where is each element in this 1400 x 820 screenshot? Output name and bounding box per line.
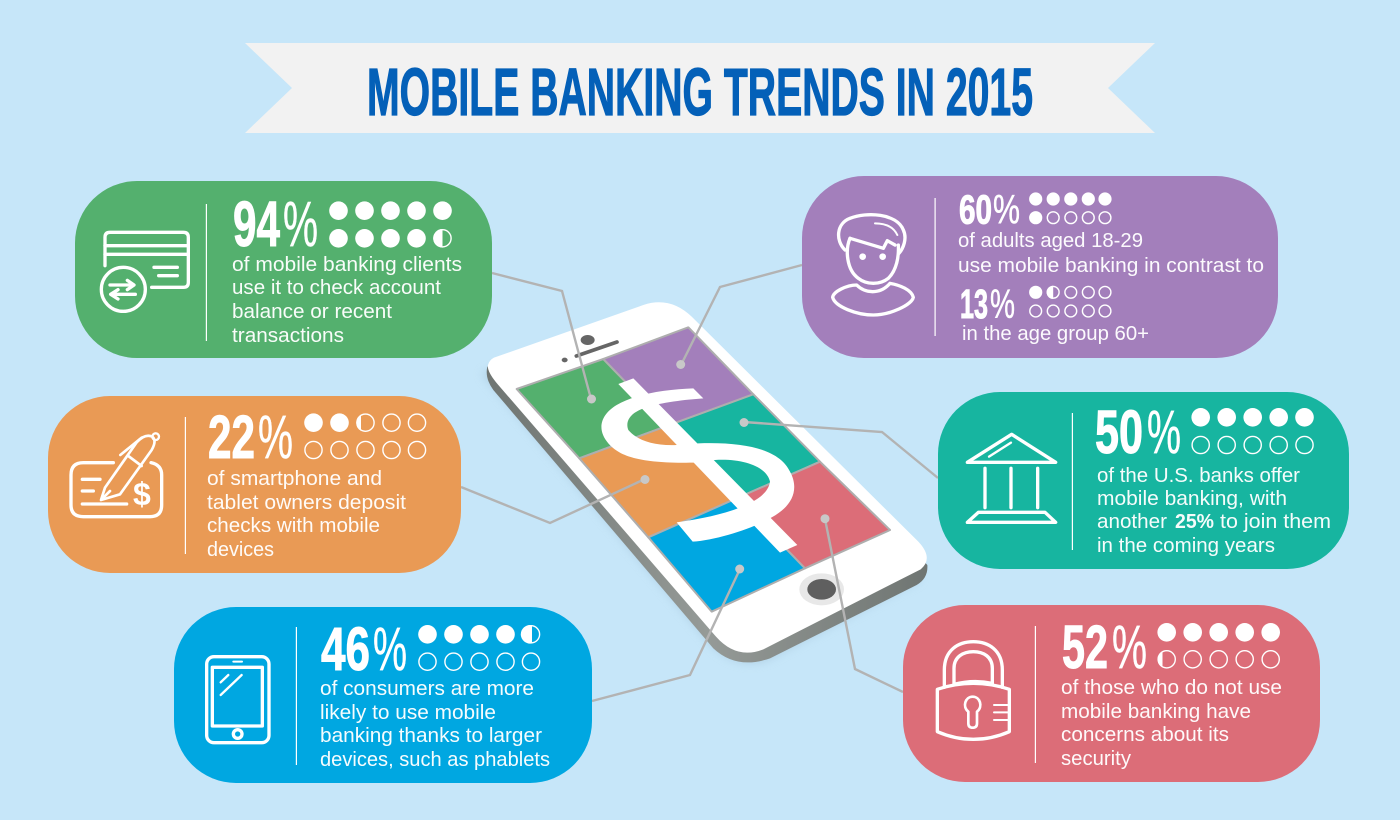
- panel: 94% account balance: [75, 181, 492, 358]
- stat: 22%: %: [258, 403, 293, 471]
- dot rating: 22%: [304, 413, 426, 459]
- dot rating: 50%: [1191, 408, 1314, 454]
- connector: orange panel to tile: [461, 475, 650, 523]
- description: [207, 467, 406, 561]
- dot rating: 52%: [1157, 623, 1280, 668]
- description: mobile banking have: [1061, 700, 1251, 723]
- description: of those who do not use: [1061, 676, 1282, 699]
- description: [320, 677, 550, 771]
- description: in the coming years: [1097, 534, 1275, 557]
- icon: young person: [833, 215, 913, 315]
- stat: 60%: 60: [959, 186, 992, 232]
- description: devices: [207, 538, 274, 561]
- description: age 60+: in the age group 60+: [962, 322, 1149, 345]
- camera and speaker: [562, 335, 617, 362]
- description: banking thanks to larger: [320, 724, 542, 747]
- description: [232, 253, 462, 347]
- dot rating: 94%: [329, 201, 452, 248]
- stat: 50%: %: [1147, 398, 1181, 466]
- description: security: [1061, 747, 1132, 770]
- stat: 13%: 13: [960, 281, 988, 327]
- icon: tablet: [207, 657, 269, 743]
- description: adults 18-29: of adults aged 18-29: [958, 229, 1143, 252]
- connector: green panel to tile: [492, 273, 596, 404]
- description: of consumers are more: [320, 677, 534, 700]
- description: adults 18-29: [958, 229, 1264, 277]
- phone shadow: [482, 317, 920, 663]
- description: [1061, 676, 1282, 770]
- description: devices, such as phablets: [320, 748, 550, 771]
- description: balance or recent: [232, 300, 392, 323]
- stat: 94%: %: [283, 188, 318, 260]
- phone side edge: [487, 357, 927, 662]
- dot rating: 46%: [418, 625, 540, 670]
- dollar sign: [601, 378, 797, 553]
- phone body: [488, 302, 927, 653]
- description: [1097, 464, 1331, 557]
- dot rating: 13%: [1029, 286, 1111, 317]
- description: 25%: [1175, 510, 1214, 533]
- panel: 52% security concerns: [903, 605, 1320, 782]
- stat: 46%: 46: [321, 615, 370, 683]
- description: tablet owners deposit: [207, 491, 406, 514]
- icon label: dollar on check: $: [133, 476, 151, 512]
- stat: 13%: %: [990, 281, 1015, 327]
- icon: check and pen: [71, 433, 162, 517]
- smartphone illustration: [482, 302, 927, 663]
- icon: bank building: [967, 434, 1056, 522]
- connector: blue panel to tile: [592, 564, 744, 701]
- stat: 46%: %: [373, 615, 407, 683]
- connector: teal panel to tile: [740, 418, 938, 478]
- connector: purple panel to tile: [676, 265, 802, 369]
- description: use it to check account: [232, 276, 441, 299]
- description: adults 18-29: use mobile banking in contrast to: [958, 254, 1264, 277]
- stat: 50%: 50: [1095, 398, 1143, 466]
- icon: credit card with transfer arrows: [101, 232, 188, 311]
- dot rating: 60%: [1029, 192, 1112, 224]
- connector: red panel to tile: [820, 514, 903, 692]
- description: concerns about its: [1061, 723, 1229, 746]
- icon: padlock: [937, 642, 1009, 739]
- stat: 52%: 52: [1062, 613, 1108, 681]
- description: transactions: [232, 324, 344, 347]
- description: checks with mobile: [207, 514, 380, 537]
- description: mobile banking, with: [1097, 487, 1287, 510]
- description: likely to use mobile: [320, 701, 496, 724]
- stat: 60%: %: [993, 186, 1020, 232]
- description: to join them: [1220, 510, 1331, 533]
- panel: 22% deposit checks: [48, 396, 461, 573]
- home button: [799, 573, 844, 605]
- stat: 52%: %: [1112, 613, 1147, 681]
- screen tiles: [517, 327, 890, 612]
- title banner: [245, 43, 1155, 133]
- panel: 46% larger devices: [174, 607, 592, 783]
- description: of the U.S. banks offer: [1097, 464, 1300, 487]
- description: of smartphone and: [207, 467, 382, 490]
- stat: 94%: 94: [233, 188, 280, 260]
- description: of mobile banking clients: [232, 253, 462, 276]
- panel: 50% of banks: [938, 392, 1349, 569]
- stat: 22%: 22: [208, 403, 255, 471]
- panel: 60% and 13% by age: [802, 176, 1278, 358]
- description: another: [1097, 510, 1167, 533]
